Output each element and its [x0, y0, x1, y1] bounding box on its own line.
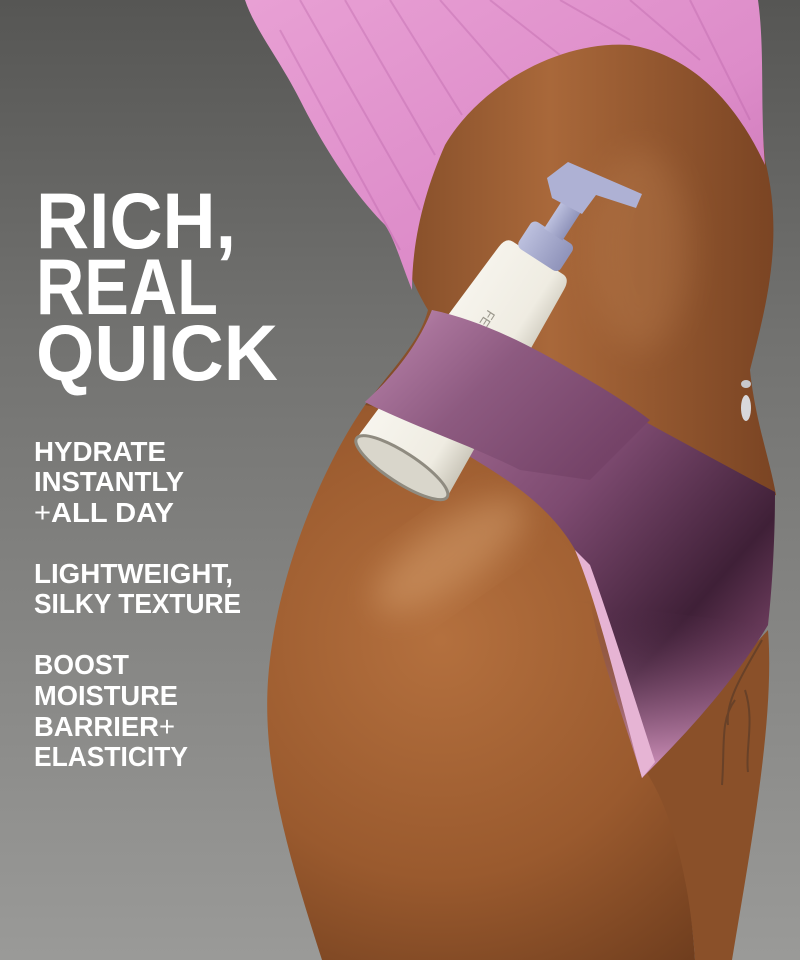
pump neck	[544, 193, 585, 241]
tattoo	[722, 640, 762, 785]
benefit: hydrate	[34, 436, 184, 528]
rear leg	[640, 630, 769, 960]
product: pump bottle	[348, 170, 621, 510]
metallic briefs	[365, 310, 775, 778]
torso	[365, 30, 776, 560]
benefit: moisture barrier	[34, 649, 188, 772]
benefit: hydrate: HYDRATE	[34, 436, 166, 467]
benefit: moisture barrier: MOISTURE	[34, 680, 178, 711]
waistband over bottle	[365, 310, 650, 480]
benefit: hydrate: INSTANTLY	[34, 466, 184, 497]
benefit: moisture barrier: BARRIER+	[34, 711, 175, 742]
bottle glass base	[348, 426, 455, 510]
benefit: hydrate: +ALL DAY	[34, 497, 174, 528]
benefit: texture	[34, 558, 241, 619]
navel piercing	[741, 380, 751, 421]
crop top	[245, 0, 765, 290]
benefit: moisture barrier: ELASTICITY	[34, 741, 188, 772]
pump collar	[516, 219, 575, 273]
figure: stylised torso and hip	[267, 30, 776, 960]
benefit: moisture barrier: BOOST	[34, 649, 129, 680]
benefit: texture: LIGHTWEIGHT,	[34, 558, 233, 589]
title: RICH,	[36, 176, 236, 265]
pump head	[547, 162, 642, 214]
title: QUICK	[36, 308, 278, 397]
bottle body	[357, 229, 583, 497]
belly sheen	[590, 150, 690, 350]
hip and front leg	[267, 405, 695, 960]
bottle brand text: FEB	[472, 307, 498, 337]
title	[36, 176, 278, 397]
hip highlight	[358, 477, 542, 633]
benefit: texture: SILKY TEXTURE	[34, 588, 241, 619]
title: REAL	[36, 242, 218, 331]
